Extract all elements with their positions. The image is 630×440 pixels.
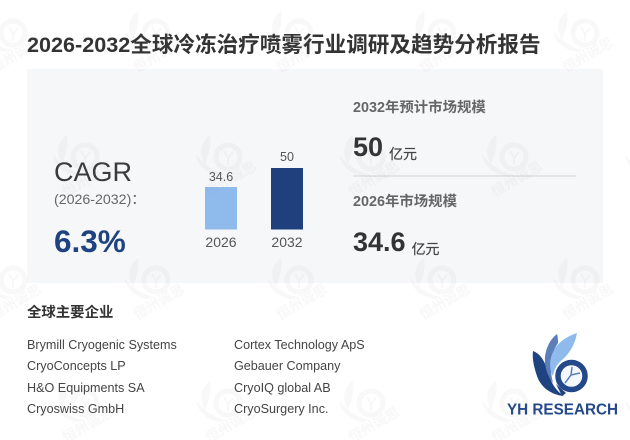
2026 market value: 34.6 亿元	[353, 227, 440, 257]
company list: column 2: CryoIQ global AB	[234, 381, 331, 395]
company list: column 1: H&O Equipments SA	[27, 381, 145, 395]
logo icon: leaves and pie circle	[533, 333, 585, 396]
logo wordmark: YH RESEARCH	[507, 402, 618, 418]
divider	[353, 175, 576, 177]
CAGR value: 6.3%	[54, 223, 126, 259]
axis label: 2026: 2026	[205, 234, 237, 250]
company list: column 2: Cortex Technology ApS	[234, 338, 365, 352]
2026 market heading: 2026年市场规模	[353, 194, 457, 210]
CAGR period: (2026-2032)：	[54, 192, 146, 208]
bar: 2032	[271, 168, 303, 230]
CAGR label: CAGR	[54, 157, 132, 187]
2032 forecast value: 50 亿元	[353, 132, 417, 162]
company list: column 1: Brymill Cryogenic Systems	[27, 338, 177, 352]
axis label: 2032: 2032	[271, 234, 303, 250]
company list: column 1	[27, 338, 177, 416]
company list: column 1: CryoConcepts LP	[27, 359, 126, 373]
company list: column 2	[234, 338, 365, 416]
bar value: 50: 50	[280, 150, 294, 164]
CAGR block	[54, 157, 146, 259]
2032 forecast heading: 2032年预计市场规模	[353, 100, 486, 116]
bar value: 34.6: 34.6	[209, 170, 233, 184]
title: 2026-2032全球冷冻治疗喷雾行业调研及趋势分析报告	[27, 32, 541, 57]
bar: 2026	[205, 187, 237, 230]
companies heading: 全球主要企业	[27, 305, 113, 321]
company list: column 2: CryoSurgery Inc.	[234, 402, 328, 416]
company list: column 2: Gebauer Company	[234, 359, 340, 373]
panel: summary background	[27, 69, 603, 283]
company list: column 1: Cryoswiss GmbH	[27, 402, 124, 416]
